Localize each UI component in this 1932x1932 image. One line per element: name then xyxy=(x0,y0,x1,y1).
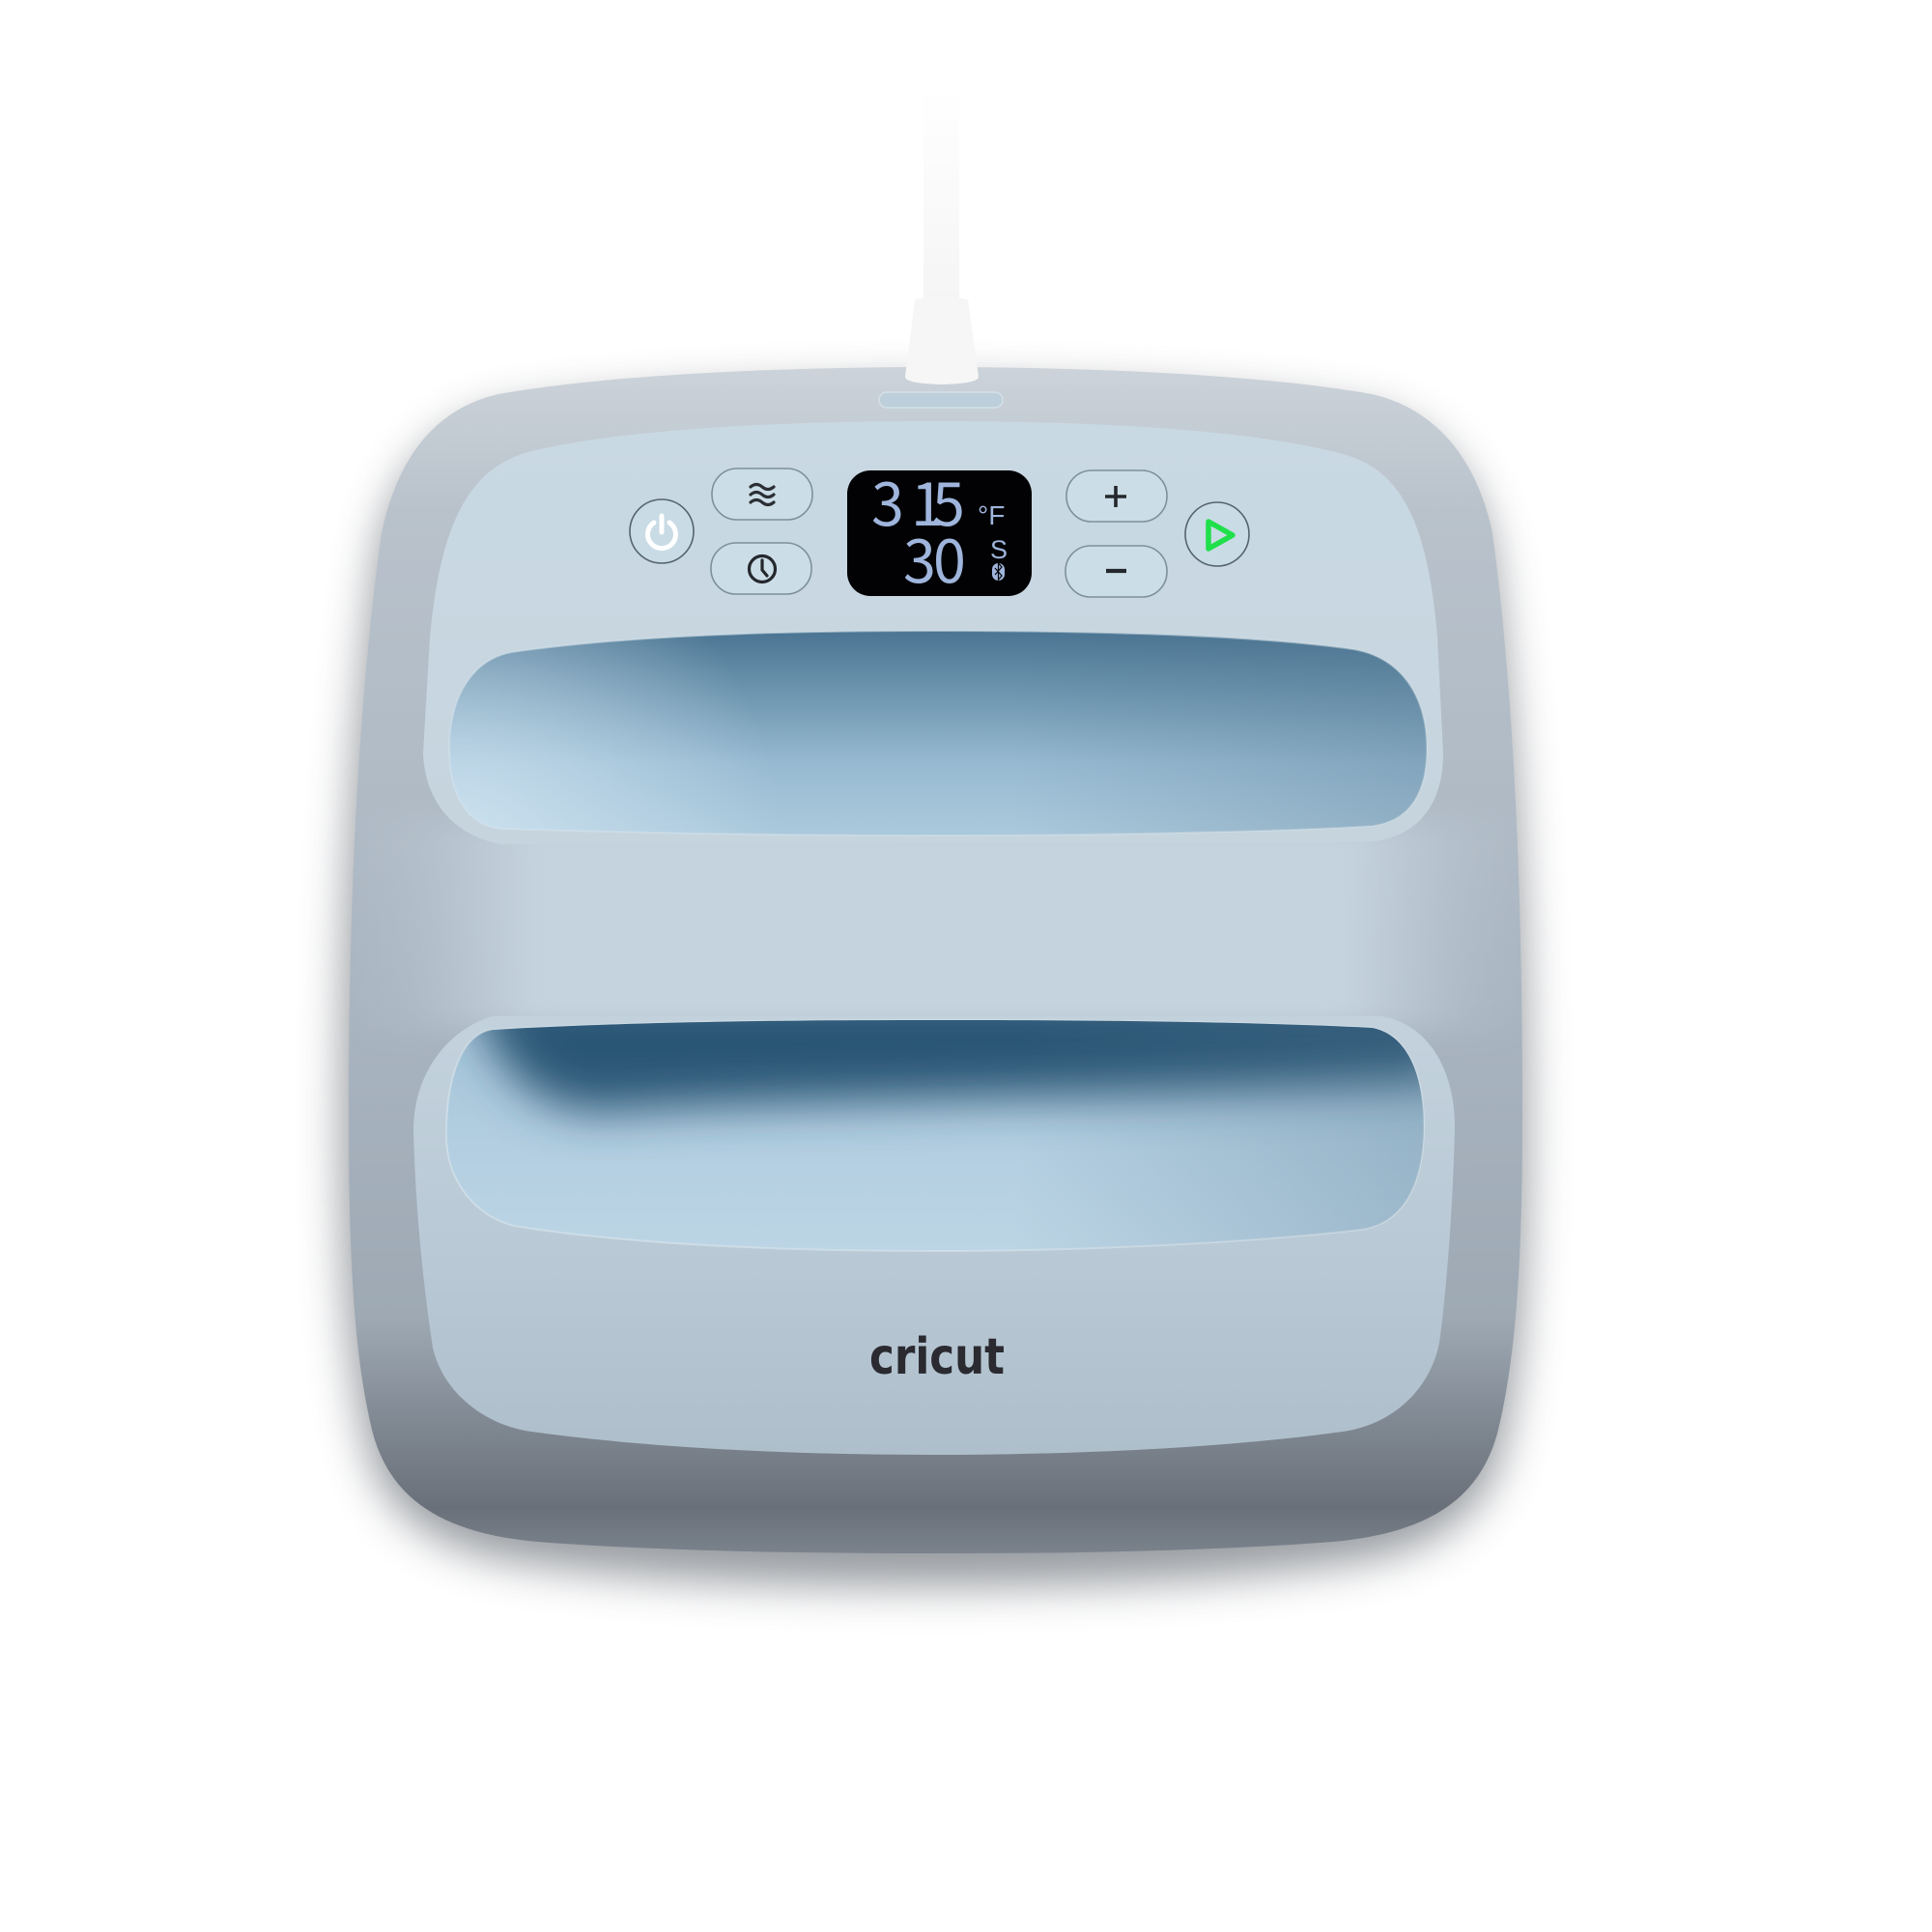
brand logo: cricut xyxy=(869,1328,1005,1386)
icon: bluetooth xyxy=(992,563,1005,581)
minus button xyxy=(1065,546,1167,597)
temperature reading: 315 xyxy=(871,457,965,543)
icon: heat waves xyxy=(751,485,774,504)
icon: power xyxy=(647,516,676,549)
start button xyxy=(1185,502,1249,566)
top inner panel xyxy=(423,421,1443,844)
icon: minus xyxy=(1106,569,1126,573)
timer button xyxy=(711,543,811,594)
illustration: heat press device, top view xyxy=(314,257,1554,1614)
heat button xyxy=(712,469,812,520)
icon: play xyxy=(1208,522,1233,549)
display screen xyxy=(847,457,1032,600)
upper handle window xyxy=(449,631,1427,836)
lower handle window xyxy=(445,1019,1425,1252)
device body xyxy=(349,367,1522,1553)
lower inner panel xyxy=(413,1016,1455,1455)
shadow under device xyxy=(342,386,1526,1586)
icon: plus xyxy=(1105,486,1126,507)
connector tab xyxy=(879,392,1003,408)
time reading: 30 xyxy=(903,514,966,600)
plus button xyxy=(1066,470,1167,522)
icon: clock xyxy=(750,556,775,582)
time unit: S xyxy=(990,535,1008,564)
handle band between windows xyxy=(425,825,1457,1029)
power cable xyxy=(905,87,979,384)
power button xyxy=(630,499,694,563)
temperature unit: °F xyxy=(978,500,1005,530)
